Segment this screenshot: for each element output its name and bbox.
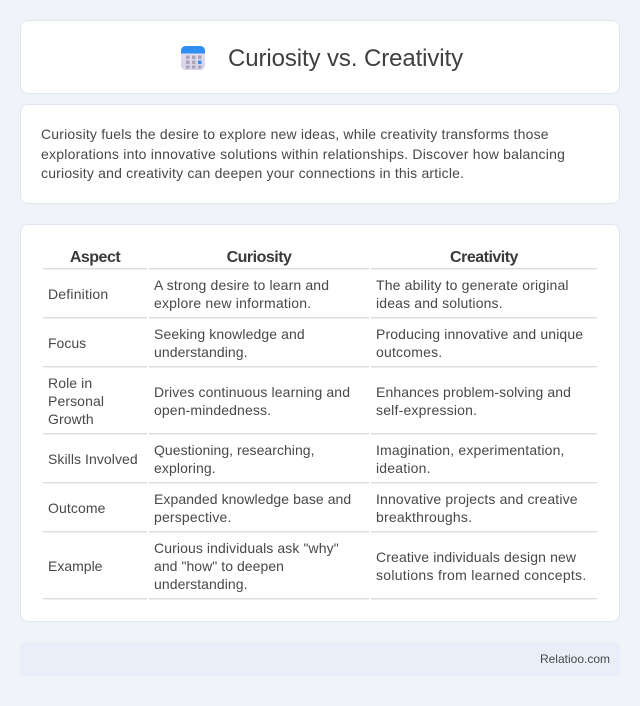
comparison table: [43, 249, 597, 600]
comparison table: Imagination, experimentation,: [376, 442, 565, 458]
header: Aspect: Aspect: [70, 249, 120, 266]
intro text: curiosity and creativity can deepen your connections in this article.: [41, 165, 464, 181]
comparison table: A strong desire to learn and: [154, 277, 329, 293]
comparison table: Seeking knowledge and: [154, 326, 305, 342]
comparison table: perspective.: [154, 509, 232, 525]
comparison table: exploring.: [154, 460, 216, 476]
footer: [20, 642, 620, 676]
intro text: Curiosity fuels the desire to explore new ideas, while creativity transforms those: [41, 126, 549, 142]
row: Outcome: Outcome: [48, 500, 106, 516]
comparison table: ideas and solutions.: [376, 295, 503, 311]
row: Focus: Focus: [48, 335, 86, 351]
comparison table: Producing innovative and unique: [376, 326, 583, 342]
title: Curiosity vs. Creativity: [228, 45, 463, 72]
comparison table: Creative individuals design new: [376, 549, 576, 565]
comparison table: Innovative projects and creative: [376, 491, 578, 507]
header: Creativity: Creativity: [450, 249, 518, 266]
comparison table: Curious individuals ask "why": [154, 540, 339, 556]
comparison table: and "how" to deepen: [154, 558, 284, 574]
comparison table: breakthroughs.: [376, 509, 472, 525]
comparison table: ideation.: [376, 460, 431, 476]
header: Curiosity: Curiosity: [227, 249, 291, 266]
row: Role in Personal Growth: Personal: [48, 393, 104, 409]
comparison table: Expanded knowledge base and: [154, 491, 351, 507]
comparison table: outcomes.: [376, 344, 442, 360]
comparison table: Drives continuous learning and: [154, 384, 350, 400]
row: Role in Personal Growth: Role in: [48, 375, 92, 391]
row: Example: Example: [48, 558, 102, 574]
intro text: [41, 126, 565, 181]
icon: calendar: [181, 46, 205, 70]
comparison table: understanding.: [154, 576, 248, 592]
comparison table: understanding.: [154, 344, 248, 360]
comparison table: self-expression.: [376, 402, 477, 418]
comparison table: Questioning, researching,: [154, 442, 315, 458]
row: Skills Involved: Skills Involved: [48, 451, 138, 467]
comparison table: The ability to generate original: [376, 277, 569, 293]
row: Definition: Definition: [48, 286, 108, 302]
title card: [20, 20, 620, 94]
comparison table: Enhances problem-solving and: [376, 384, 571, 400]
comparison table: solutions from learned concepts.: [376, 567, 587, 583]
intro text: explorations into innovative solutions within relationships. Discover how balancing: [41, 146, 565, 162]
comparison table: open-mindedness.: [154, 402, 271, 418]
comparison table: explore new information.: [154, 295, 311, 311]
footer brand: Relatioo.com: [540, 652, 610, 666]
row: Role in Personal Growth: [48, 375, 104, 427]
table card: [20, 224, 620, 622]
intro card: [20, 104, 620, 204]
row: Role in Personal Growth: Growth: [48, 411, 94, 427]
